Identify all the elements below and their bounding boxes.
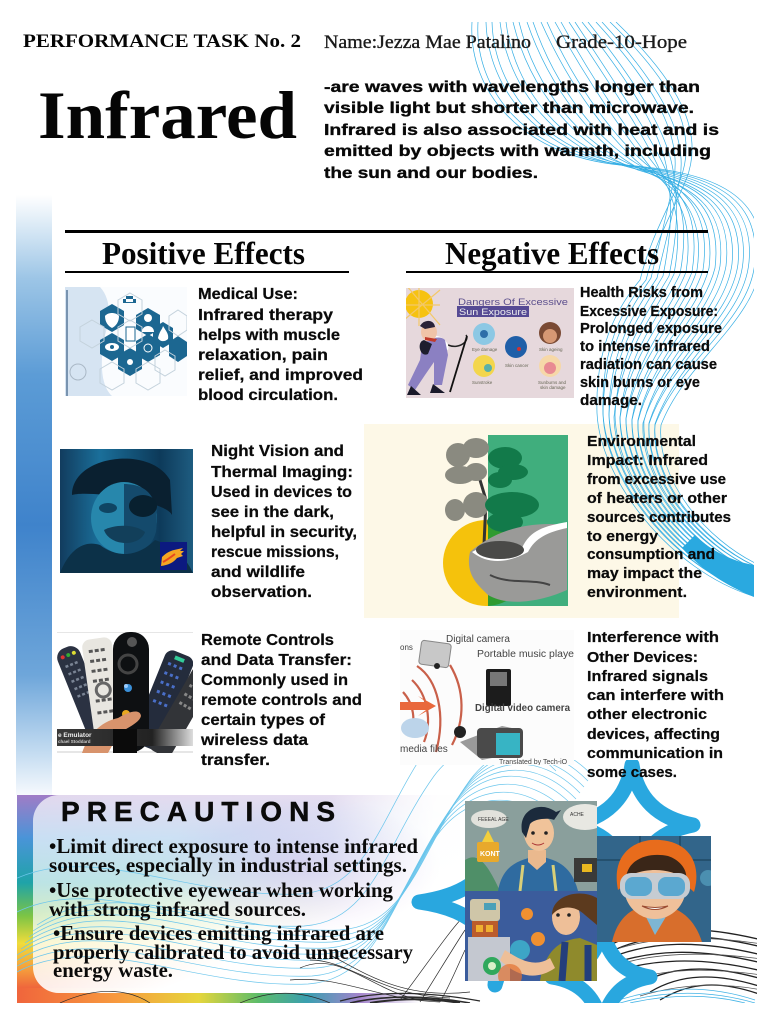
image: remote controls: e Emulator bbox=[58, 732, 92, 739]
image: sun exposure dangers: Sunstroke bbox=[472, 380, 493, 385]
text block: environmental impact: environment. bbox=[587, 584, 687, 601]
text block: environmental impact: to energy bbox=[587, 528, 659, 545]
text block: night vision: Thermal Imaging: bbox=[211, 464, 353, 481]
text block: health risks: radiation can cause bbox=[580, 356, 717, 373]
decorative wave lines bbox=[472, 22, 761, 597]
text block: interference: communication in bbox=[587, 745, 723, 762]
text block: precaution list: •Limit direct exposure to intense infrared bbox=[49, 834, 418, 858]
text block: environmental impact: consumption and bbox=[587, 546, 715, 563]
divider lines bbox=[65, 230, 708, 273]
text block: definition: -are waves with wavelengths longer than bbox=[324, 79, 700, 96]
heading: precautions: PRECAUTIONS bbox=[61, 796, 335, 827]
text block: interference: Other Devices: bbox=[587, 649, 698, 666]
text block: interference: other electronic bbox=[587, 706, 707, 723]
text block: remote controls: wireless data bbox=[200, 732, 308, 749]
image: infrared devices diagram: ons bbox=[400, 643, 413, 652]
text block: night vision: helpful in security, bbox=[211, 524, 357, 541]
text block: definition bbox=[324, 79, 719, 182]
text block: medical use: Medical Use: bbox=[198, 286, 298, 303]
image: cartoon technician: KONT bbox=[480, 851, 501, 858]
text block: interference: Infrared signals bbox=[587, 668, 708, 685]
text block: interference: can interfere with bbox=[587, 687, 724, 704]
image: environment tree and hands bbox=[443, 435, 568, 606]
text block: precaution list: •Use protective eyewear when working bbox=[49, 878, 393, 902]
text block: interference bbox=[587, 629, 724, 781]
text block: environmental impact: from excessive use bbox=[587, 471, 726, 488]
image: sun exposure dangers: Skin cancer bbox=[505, 363, 529, 368]
image: infrared devices diagram: media files bbox=[400, 744, 448, 755]
image: sun exposure dangers: Sunburns and bbox=[538, 380, 567, 385]
text block: precaution list: properly calibrated to avoid unnecessary bbox=[53, 940, 413, 964]
text block: definition: visible light but shorter than microwave. bbox=[324, 100, 694, 117]
text block: night vision bbox=[211, 443, 357, 601]
text block: precaution list: •Ensure devices emitting infrared are bbox=[53, 921, 384, 945]
text block: night vision: see in the dark, bbox=[211, 504, 334, 521]
heading: positive effects: Positive Effects bbox=[102, 235, 305, 271]
text block: interference: Interference with bbox=[587, 629, 719, 646]
text block: health risks: Health Risks from bbox=[580, 284, 703, 301]
icon: blue star shapes bbox=[419, 765, 693, 1024]
image: sun exposure dangers: Skin ageing bbox=[539, 347, 563, 352]
image: sun exposure dangers: Eye damage bbox=[472, 347, 498, 352]
text block: remote controls: remote controls and bbox=[201, 692, 362, 709]
image: remote controls bbox=[57, 632, 193, 753]
text block: precaution list: with strong infrared sources. bbox=[49, 897, 306, 921]
text block: environmental impact bbox=[587, 433, 731, 601]
image: infrared devices diagram: Portable music playe bbox=[477, 649, 574, 660]
text block: night vision: rescue missions, bbox=[211, 544, 339, 561]
text block: precaution list: sources, especially in industrial settings. bbox=[49, 853, 407, 877]
image: infrared devices diagram: Digital video camera bbox=[475, 703, 570, 714]
title: Infrared bbox=[38, 77, 297, 153]
image: sun exposure dangers: skin damage bbox=[540, 385, 566, 390]
text block: health risks: Prolonged exposure bbox=[580, 320, 722, 337]
image: cartoon technician bbox=[465, 801, 607, 891]
image: medical hexagons bbox=[65, 287, 187, 396]
header: performance task: PERFORMANCE TASK No. 2 bbox=[23, 31, 301, 52]
text block: night vision: observation. bbox=[211, 584, 312, 601]
image: cartoon technician: FEEEAL AGE bbox=[478, 817, 509, 823]
text block: environmental impact: may impact the bbox=[587, 565, 702, 582]
image: sun exposure dangers: Dangers Of Excessive bbox=[458, 297, 568, 308]
heading: negative effects: Negative Effects bbox=[445, 235, 659, 271]
panel: precautions background bbox=[17, 760, 757, 1003]
image: infrared devices diagram: Translated by Tech-iO bbox=[499, 759, 568, 766]
panel: environment image background bbox=[364, 424, 679, 618]
text block: precaution list: energy waste. bbox=[53, 958, 173, 982]
image: sun exposure dangers bbox=[404, 284, 574, 398]
text block: remote controls: certain types of bbox=[201, 712, 326, 729]
text block: definition: Infrared is also associated with heat and is bbox=[324, 122, 719, 139]
text block: medical use: blood circulation. bbox=[198, 387, 338, 404]
text block: health risks: skin burns or eye bbox=[580, 374, 700, 391]
text block: environmental impact: Impact: Infrared bbox=[587, 452, 708, 469]
text block: definition: emitted by objects with warmth, including bbox=[324, 143, 711, 160]
text block: environmental impact: of heaters or other bbox=[587, 490, 727, 507]
text block: medical use: helps with muscle bbox=[198, 327, 340, 344]
text block: remote controls bbox=[200, 632, 362, 769]
text block: medical use: relief, and improved bbox=[198, 367, 363, 384]
text block: environmental impact: sources contributes bbox=[587, 509, 731, 526]
image: night vision soldier bbox=[60, 449, 193, 573]
image: cartoon child with goggles bbox=[597, 836, 716, 942]
text block: medical use bbox=[198, 286, 363, 404]
text block: remote controls: transfer. bbox=[201, 752, 270, 769]
image: cartoon technician: ACHE bbox=[570, 812, 585, 818]
text block: medical use: Infrared therapy bbox=[198, 307, 333, 324]
image: infrared devices diagram bbox=[400, 630, 574, 766]
text block: night vision: and wildlife bbox=[211, 564, 305, 581]
left gradient bar bbox=[16, 195, 52, 795]
text block: interference: some cases. bbox=[587, 764, 677, 781]
image: sun exposure dangers: Sun Exposure bbox=[459, 307, 527, 318]
text block: health risks: damage. bbox=[580, 392, 642, 409]
text block: medical use: relaxation, pain bbox=[198, 347, 328, 364]
text block: health risks: Excessive Exposure: bbox=[580, 303, 718, 320]
text block: remote controls: Commonly used in bbox=[201, 672, 348, 689]
image: cartoon engineer at machine bbox=[465, 891, 597, 988]
text block: health risks bbox=[580, 284, 722, 409]
text block: health risks: to intense infrared bbox=[580, 338, 710, 355]
text block: precaution list bbox=[49, 834, 418, 982]
header: student name: Name:Jezza Mae Patalino bbox=[324, 32, 531, 53]
text block: remote controls: Remote Controls bbox=[201, 632, 334, 649]
image: infrared devices diagram: Digital camera bbox=[446, 634, 510, 645]
text block: definition: the sun and our bodies. bbox=[324, 165, 538, 182]
text block: night vision: Night Vision and bbox=[211, 443, 344, 460]
text block: interference: devices, affecting bbox=[587, 726, 720, 743]
text block: environmental impact: Environmental bbox=[587, 433, 696, 450]
text block: night vision: Used in devices to bbox=[211, 484, 352, 501]
text block: remote controls: and Data Transfer: bbox=[201, 652, 352, 669]
header: grade and section: Grade-10-Hope bbox=[556, 32, 687, 53]
image: remote controls: chael Stoddard bbox=[58, 739, 91, 744]
